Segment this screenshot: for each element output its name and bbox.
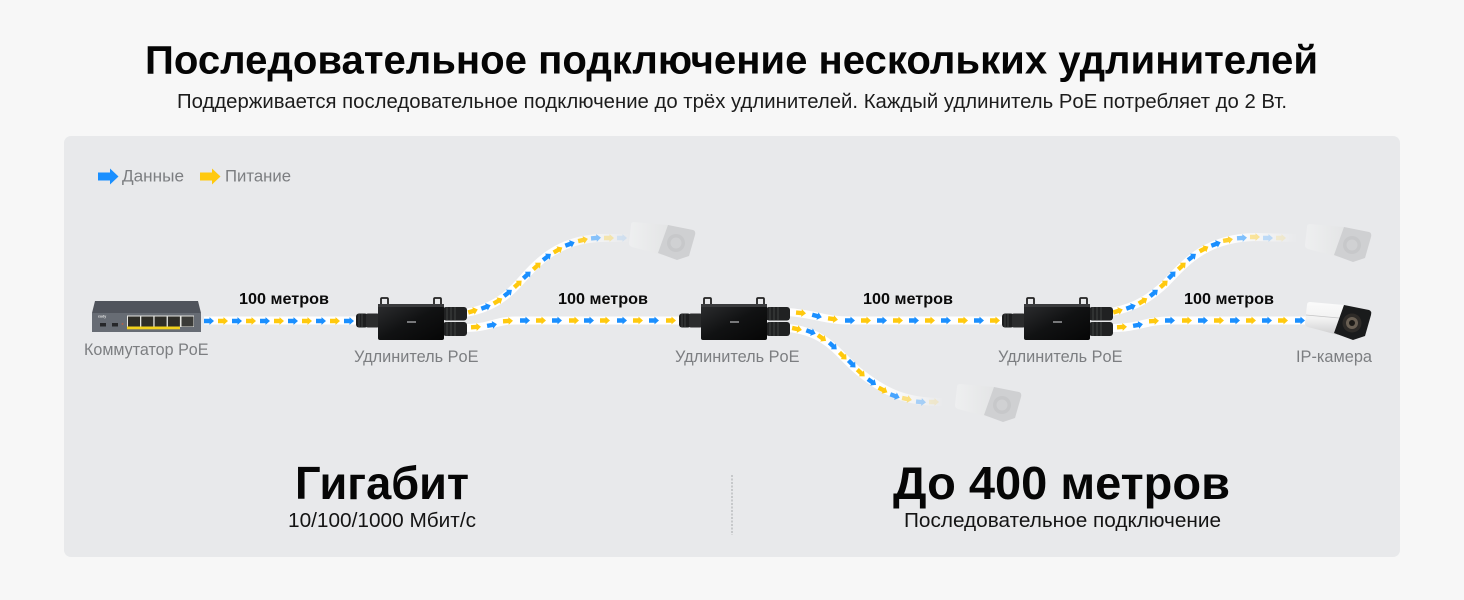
legend label: data: Данные	[122, 168, 184, 186]
icon: faded camera 1	[629, 222, 695, 260]
icon: faded camera 2	[955, 384, 1021, 422]
title: Последовательное подключение нескольких удлинителей	[145, 38, 1318, 82]
distance label 4: 100 метров	[1184, 291, 1274, 308]
icon: extender 2	[679, 298, 790, 340]
label: IP camera: IP-камера	[1296, 348, 1373, 366]
stat: gigabit: 10/100/1000 Мбит/с	[288, 510, 476, 532]
cable: switch to extender 1	[204, 317, 358, 325]
icon: IP camera	[1305, 302, 1371, 340]
icon: PoE switch: cudy	[98, 314, 106, 318]
cable: extender 3 to IP camera	[1111, 317, 1308, 331]
distance label 1: 100 метров	[239, 291, 329, 308]
icon: extender 1	[356, 298, 467, 340]
stat: distance: До 400 метров	[893, 457, 1230, 509]
label: switch: Коммутатор PoE	[84, 341, 208, 359]
stat: distance: Последовательное подключение	[904, 510, 1221, 532]
subtitle: Поддерживается последовательное подключение до трёх удлинителей. Каждый удлинитель PoE потребляет до 2 Вт.	[177, 91, 1287, 113]
icon: faded camera 3	[1305, 224, 1371, 262]
cable: extender 3 to faded camera	[1111, 233, 1298, 316]
panel: diagram	[64, 136, 1400, 557]
cable: extender 1 to faded camera	[465, 234, 630, 316]
cable: extender 1 to extender 2	[465, 317, 680, 331]
legend	[98, 168, 291, 186]
icon: data arrow	[98, 168, 118, 184]
label: extender 2: Удлинитель PoE	[675, 348, 800, 366]
distance label 3: 100 метров	[863, 291, 953, 308]
cable: extender 2 to extender 3	[788, 309, 1003, 324]
legend label: power: Питание	[225, 168, 291, 186]
distance label 2: 100 метров	[558, 291, 648, 308]
cable: extender 2 to faded camera	[788, 324, 942, 406]
icon: PoE switch	[92, 301, 201, 332]
icon: extender 3	[1002, 298, 1113, 340]
stat: distance	[893, 457, 1230, 532]
label: extender 1: Удлинитель PoE	[354, 348, 478, 366]
label: extender 3: Удлинитель PoE	[998, 348, 1122, 366]
stat: gigabit	[288, 457, 476, 532]
stat: gigabit: Гигабит	[295, 457, 469, 509]
icon: power arrow	[200, 168, 220, 184]
